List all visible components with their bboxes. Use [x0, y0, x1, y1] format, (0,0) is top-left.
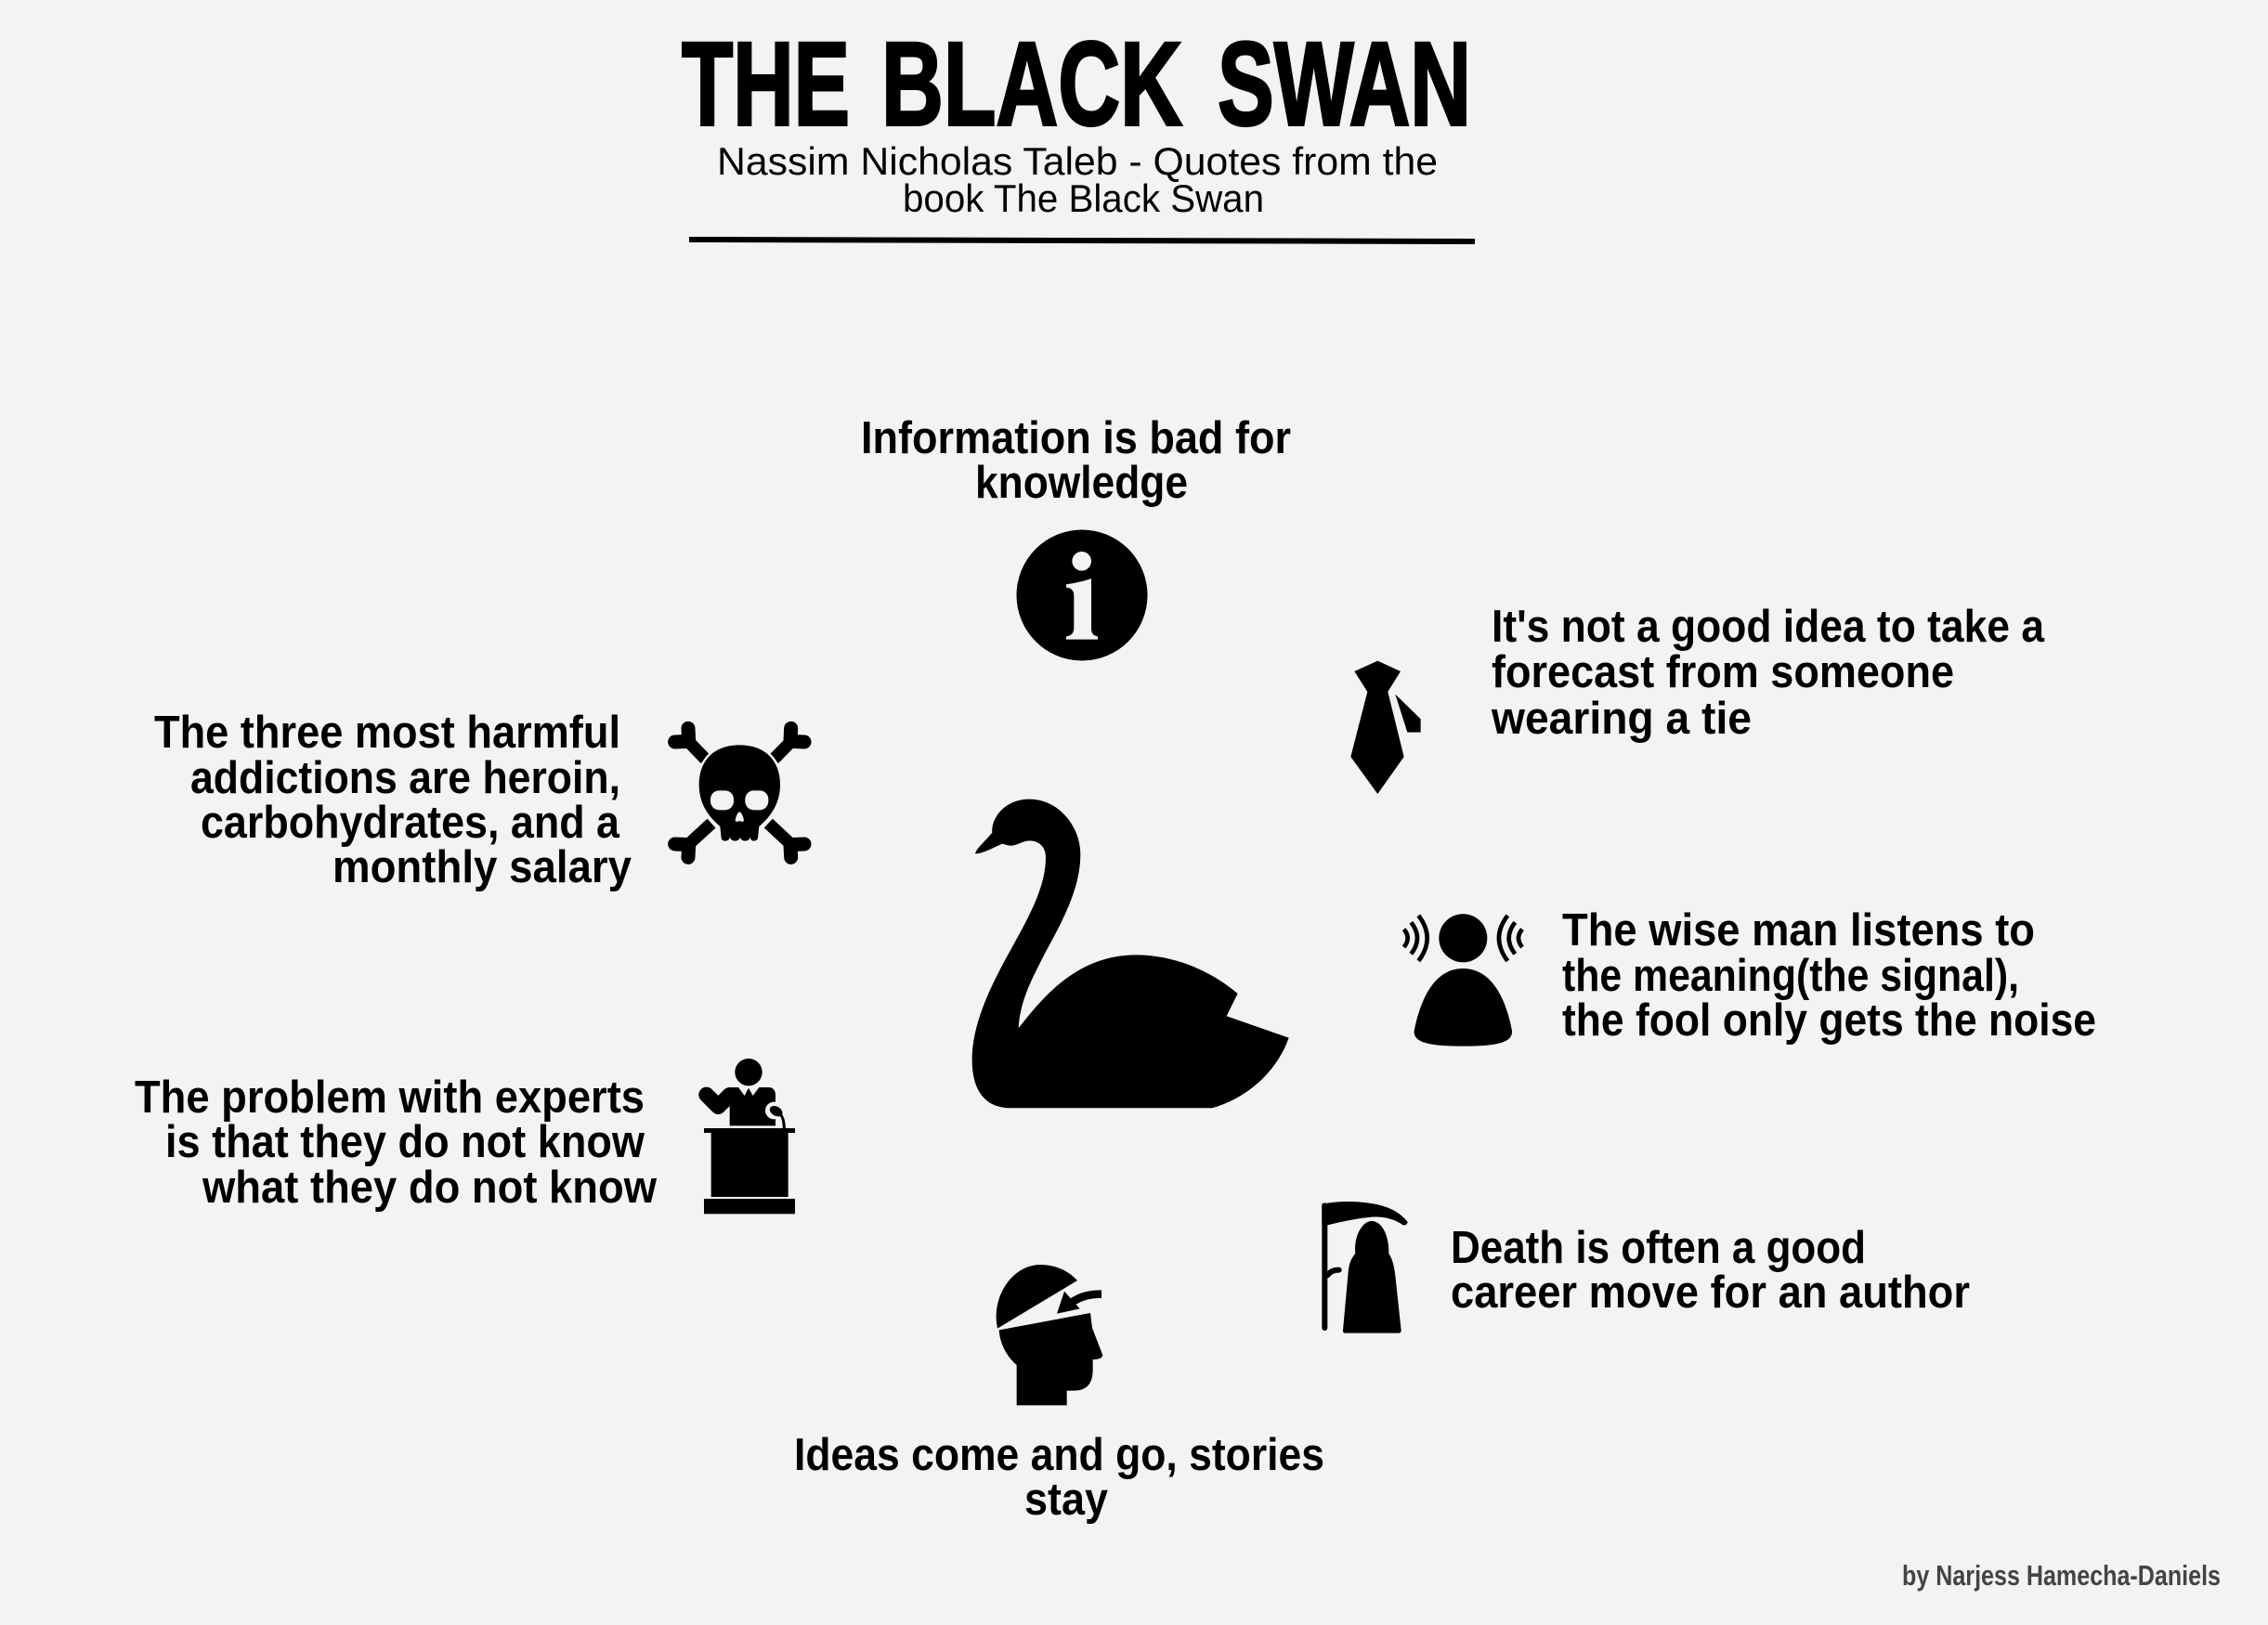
- subtitle: book The Black Swan: [903, 176, 1264, 220]
- title: BLACK: [881, 19, 1182, 150]
- subtitle: Nassim Nicholas Taleb - Quotes from the: [717, 139, 1438, 183]
- quote: ideas: [794, 1430, 1324, 1525]
- quote: information: [861, 413, 1291, 508]
- quote: addictions: [154, 708, 632, 892]
- icon: head with idea arrow: [997, 1265, 1102, 1405]
- quote: tie: It's not a good idea to take a: [1492, 602, 2045, 652]
- quote: tie: forecast from someone: [1492, 647, 1954, 697]
- quote: information: knowledge: [975, 458, 1188, 508]
- quote: experts: what they do not know: [202, 1163, 658, 1213]
- quote: tie: wearing a tie: [1491, 694, 1752, 744]
- quote: wise man: the fool only gets the noise: [1562, 995, 2096, 1046]
- quote: experts: [135, 1072, 658, 1213]
- title: SWAN: [1218, 19, 1471, 150]
- icon: skull and crossbones: [675, 728, 804, 857]
- title: THE: [682, 19, 850, 150]
- quote: death: career move for an author: [1451, 1268, 1970, 1318]
- quote: addictions: The three most harmful: [154, 708, 620, 758]
- quote: wise man: the meaning(the signal),: [1562, 951, 2019, 1001]
- quote: ideas: Ideas come and go, stories: [794, 1430, 1324, 1480]
- quote: death: [1451, 1223, 1970, 1318]
- icon: grim reaper: [1322, 1202, 1408, 1333]
- icon: listener with sound waves: [1404, 914, 1522, 1046]
- icon: speaker at podium: [704, 1059, 795, 1214]
- quote: addictions: addictions are heroin,: [190, 753, 620, 803]
- quote: wise man: The wise man listens to: [1562, 905, 2035, 956]
- title: [682, 19, 1471, 150]
- quote: tie: [1491, 602, 2045, 744]
- quote: experts: is that they do not know: [165, 1117, 645, 1167]
- icon: information: [1016, 529, 1148, 661]
- quote: death: Death is often a good: [1451, 1223, 1866, 1273]
- quote: ideas: stay: [1024, 1475, 1108, 1525]
- icon: tie: [1350, 661, 1421, 794]
- subtitle: [717, 139, 1438, 220]
- quote: addictions: monthly salary: [332, 842, 632, 892]
- quote: experts: The problem with experts: [135, 1072, 645, 1123]
- quote: wise man: [1562, 905, 2096, 1046]
- quote: information: Information is bad for: [861, 413, 1291, 463]
- swan: [972, 800, 1289, 1108]
- quote: addictions: carbohydrates, and a: [201, 798, 620, 848]
